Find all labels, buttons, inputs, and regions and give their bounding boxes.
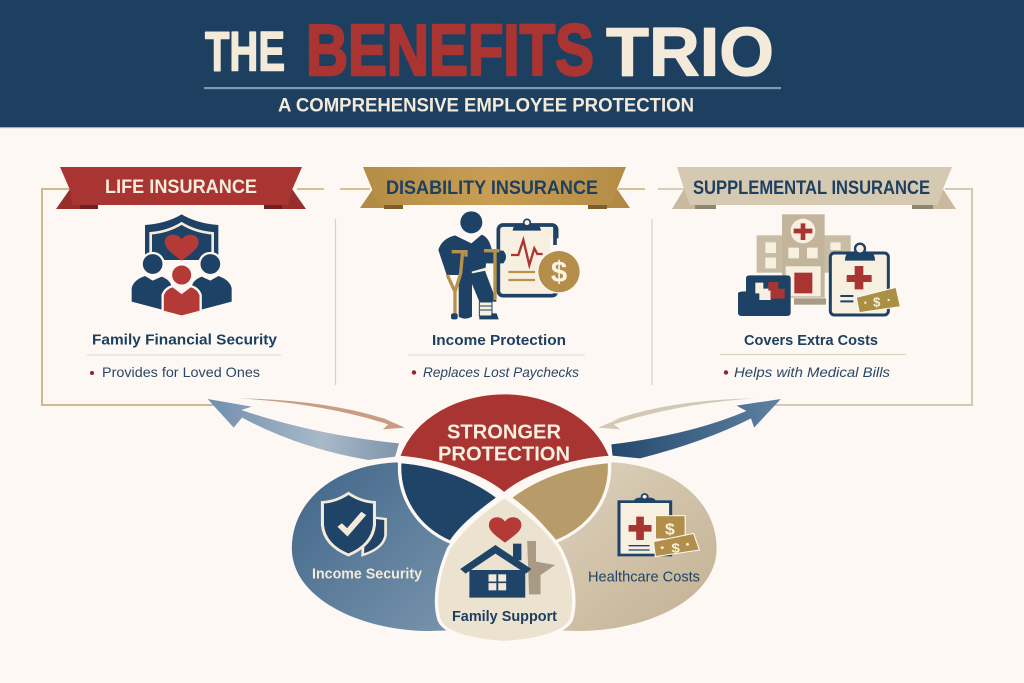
bullet: replaces lost paychecks: Replaces Lost Paychecks bbox=[423, 364, 579, 380]
venn lobe: healthcare costs bbox=[537, 462, 717, 631]
venn diagram: stronger protection bbox=[208, 393, 781, 642]
panel frame bbox=[42, 189, 972, 405]
header banner bbox=[0, 0, 1024, 128]
ribbon: supplemental insurance bbox=[672, 167, 956, 209]
title: TRIO bbox=[606, 14, 774, 90]
arrow: right incoming bbox=[598, 398, 755, 429]
bullet: provides for loved ones: Provides for Loved Ones bbox=[102, 364, 260, 380]
icon: shield with check bbox=[322, 493, 386, 555]
icon: hospital, medical kit and bill bbox=[738, 214, 900, 316]
venn segment: navy overlap bbox=[400, 462, 498, 542]
icon: clipboard and money bbox=[619, 494, 699, 557]
label: healthcare costs: Healthcare Costs bbox=[588, 568, 700, 586]
title bbox=[205, 11, 774, 91]
arrow: left incoming bbox=[238, 398, 405, 429]
venn segment: stronger protection bbox=[399, 393, 610, 493]
venn segment: gold overlap bbox=[510, 462, 610, 542]
icon: clipboard and money: $ bbox=[665, 521, 675, 538]
icon: family under shield bbox=[132, 214, 232, 317]
label: family support: Family Support bbox=[452, 608, 557, 625]
venn lobe: family support bbox=[437, 497, 574, 642]
label: stronger protection: PROTECTION bbox=[438, 444, 570, 466]
icon: clipboard and money: $ bbox=[671, 542, 680, 556]
icon: heart bbox=[489, 517, 521, 543]
title: BENEFITS bbox=[306, 11, 594, 91]
ribbon: disability insurance: DISABILITY INSURANCE bbox=[386, 178, 598, 199]
ribbon: life insurance: LIFE INSURANCE bbox=[105, 177, 257, 198]
label: stronger protection bbox=[438, 422, 570, 466]
bullet: helps with medical bills: Helps with Medical Bills bbox=[734, 364, 890, 380]
icon: house bbox=[460, 541, 555, 598]
icon: injured worker with clipboard: $ bbox=[551, 256, 567, 289]
heading: income protection: Income Protection bbox=[432, 333, 566, 349]
title: THE bbox=[205, 20, 285, 82]
label: income security: Income Security bbox=[312, 566, 423, 582]
heading: family financial security: Family Financial Security bbox=[92, 332, 277, 348]
icon: hospital, medical kit and bill: $ bbox=[873, 295, 881, 310]
venn lobe: income security bbox=[292, 462, 468, 631]
label: stronger protection: STRONGER bbox=[447, 422, 562, 444]
panel: supplemental insurance bbox=[672, 167, 956, 380]
ribbon: disability insurance bbox=[360, 167, 630, 209]
subtitle: A COMPREHENSIVE EMPLOYEE PROTECTION bbox=[278, 94, 694, 116]
heading: covers extra costs: Covers Extra Costs bbox=[744, 333, 878, 349]
ribbon: life insurance bbox=[56, 167, 306, 209]
arrow: left outgoing bbox=[208, 399, 399, 460]
ribbon: supplemental insurance: SUPPLEMENTAL INSURANCE bbox=[693, 178, 930, 199]
panel: life insurance bbox=[56, 167, 306, 380]
icon: injured worker with clipboard bbox=[438, 211, 581, 319]
panel: disability insurance bbox=[360, 167, 630, 380]
arrow: right outgoing bbox=[611, 399, 781, 458]
